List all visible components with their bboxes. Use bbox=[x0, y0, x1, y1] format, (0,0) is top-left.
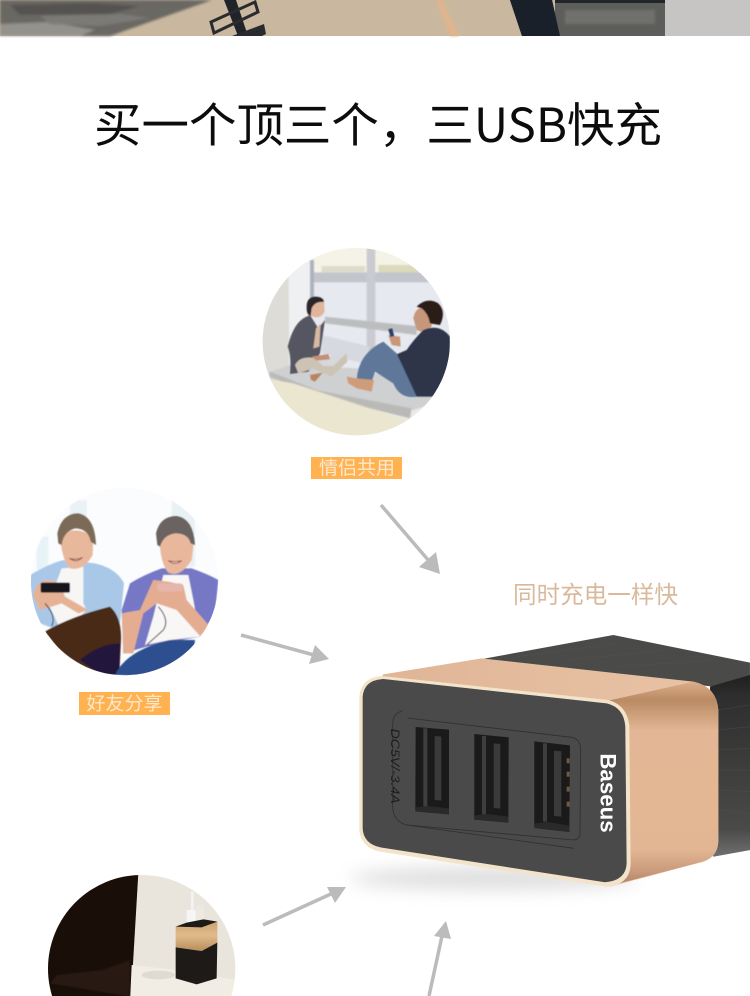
miniature charger bbox=[176, 919, 217, 984]
photo circle: couple sharing bbox=[260, 247, 453, 440]
recessed port outline bbox=[393, 711, 581, 848]
arrow: from couples to charger bbox=[381, 505, 440, 574]
product: three-port USB charger bbox=[350, 635, 750, 890]
rating text: DC5V/-3.4A bbox=[388, 729, 401, 804]
caption: charges equally fast: 同时充电一样快 bbox=[513, 582, 678, 609]
front face rim bbox=[359, 676, 631, 887]
USB ports bbox=[415, 727, 570, 832]
right friend bbox=[122, 568, 218, 653]
man with phone bbox=[413, 307, 433, 333]
front face bbox=[363, 679, 627, 882]
left friend bbox=[30, 560, 124, 628]
brand text: Baseus bbox=[595, 753, 620, 833]
dark television bbox=[47, 873, 138, 996]
label: friends sharing: 好友分享 bbox=[86, 693, 162, 714]
photo circle: charger next to TV bbox=[47, 873, 237, 996]
arrow: from bottom left to charger bbox=[263, 887, 346, 925]
black housing bbox=[477, 635, 750, 857]
top photo strip: notebook on wood desk bbox=[0, 0, 750, 36]
woman with laptop bbox=[307, 298, 325, 317]
gold band bbox=[382, 658, 718, 887]
white plugs bbox=[186, 892, 196, 922]
photo circle: friends sharing bbox=[30, 487, 220, 677]
arrow: from friends to charger bbox=[241, 635, 329, 664]
title: 买一个顶三个，三USB快充 bbox=[94, 87, 662, 156]
label: couples sharing: 情侣共用 bbox=[319, 458, 395, 478]
power strip bbox=[130, 965, 237, 996]
arrow: from bottom to charger bbox=[429, 921, 451, 996]
